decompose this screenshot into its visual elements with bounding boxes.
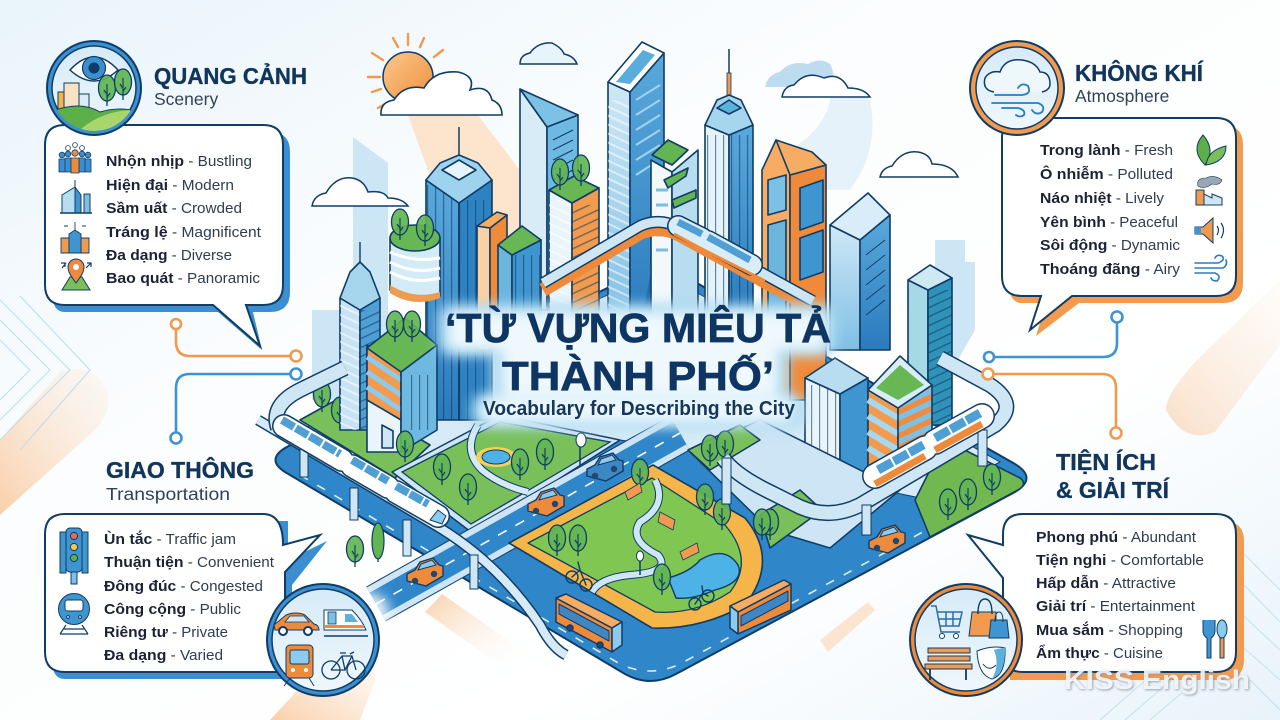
icon: eye and city scenery xyxy=(47,41,141,140)
vocabulary list: Tráng lệ - Magnificent xyxy=(106,224,261,241)
icon: map pin xyxy=(61,259,91,290)
building: striped left centre xyxy=(367,311,437,452)
icon: skyscrapers xyxy=(60,180,92,213)
faded background skyline xyxy=(312,70,975,400)
vocabulary list xyxy=(1040,142,1181,278)
vocabulary list: Hiện đại - Modern xyxy=(106,177,234,194)
vocabulary list: Phong phú - Abundant xyxy=(1036,529,1196,546)
park block upper left xyxy=(392,415,620,532)
right elevated rail and train xyxy=(722,358,1006,535)
icon: far right cloud xyxy=(880,152,958,177)
building: white terraced xyxy=(651,140,698,320)
icon: cloud and wind xyxy=(970,41,1064,135)
title glow xyxy=(438,304,836,428)
green patch behind train xyxy=(300,381,430,478)
city illustration xyxy=(258,42,1026,681)
building: orange and blue panels xyxy=(762,140,826,400)
watermark: KISS English xyxy=(1064,665,1250,695)
building: slim left tower xyxy=(340,242,380,430)
train: left xyxy=(282,420,446,524)
block lower right xyxy=(688,420,900,548)
icon: left cloud xyxy=(312,178,408,206)
vocabulary list: Đa dạng - Diverse xyxy=(106,247,232,264)
panel: Tiện ích và giải trí xyxy=(910,448,1244,696)
icon: pond xyxy=(668,554,739,598)
icon: sun xyxy=(368,34,443,108)
icon: metro train xyxy=(58,594,90,634)
vocabulary list: Đông đúc - Congested xyxy=(104,578,263,595)
building: striped right xyxy=(868,356,932,490)
icon: vehicles circle xyxy=(267,584,379,696)
vocabulary list xyxy=(106,153,261,287)
building: teal slim xyxy=(908,265,952,425)
road dashes xyxy=(300,475,1000,671)
vocabulary list: Riêng tư - Private xyxy=(104,624,228,641)
platform base xyxy=(276,262,1026,681)
train: skyway xyxy=(674,222,765,281)
building: wedge tower xyxy=(520,89,578,310)
green right corner xyxy=(915,440,1024,537)
building: orange slab xyxy=(477,212,507,350)
subheading: Atmosphere xyxy=(1075,86,1169,106)
back buildings xyxy=(340,42,952,505)
icon: cars xyxy=(407,453,905,586)
building: white and orange with roof garden xyxy=(549,155,599,330)
bubble xyxy=(1002,118,1243,336)
vocabulary list: Tiện nghi - Comfortable xyxy=(1036,552,1204,569)
vocabulary list: Ẩm thực - Cuisine xyxy=(1036,644,1163,662)
bubble xyxy=(45,514,327,679)
subheading: Transportation xyxy=(106,484,230,504)
icon: right cloud xyxy=(765,60,870,97)
upper skyway and train xyxy=(543,222,813,308)
vocabulary list: Trong lành - Fresh xyxy=(1040,142,1173,159)
icon: cyclists xyxy=(566,562,714,610)
title xyxy=(445,305,831,420)
vocabulary list: Yên bình - Peaceful xyxy=(1040,214,1178,231)
heading: QUANG CẢNH xyxy=(154,61,307,89)
panel: Giao thông xyxy=(45,456,379,696)
icon: crowd xyxy=(59,143,91,173)
left elevated rail and train xyxy=(258,368,566,655)
heading: GIAO THÔNG xyxy=(106,456,254,483)
title: THÀNH PHỐ’ xyxy=(502,353,774,399)
icon: bus right xyxy=(730,580,791,634)
building: round green roof xyxy=(390,209,440,302)
subheading: Scenery xyxy=(154,89,218,109)
building: spire tower xyxy=(705,49,753,320)
vocabulary list: Nhộn nhịp - Bustling xyxy=(106,153,252,170)
icon: leaves xyxy=(1197,135,1226,165)
vocabulary list: Hấp dẫn - Attractive xyxy=(1036,575,1176,592)
bubble xyxy=(45,125,290,350)
title: ‘TỪ VỰNG MIÊU TẢ xyxy=(445,305,831,351)
icon: grand building xyxy=(61,222,89,253)
vocabulary list: Mua sắm - Shopping xyxy=(1036,621,1183,639)
icon: wind xyxy=(1195,255,1227,281)
vocabulary list: Náo nhiệt - Lively xyxy=(1040,190,1165,207)
trees outside platform xyxy=(346,523,384,567)
icon: large cloud xyxy=(381,72,502,115)
heading: KHÔNG KHÍ xyxy=(1075,59,1204,86)
vocabulary list: Sôi động - Dynamic xyxy=(1040,237,1180,254)
icon: benches xyxy=(625,483,699,560)
subtitle: Vocabulary for Describing the City xyxy=(483,398,796,420)
vocabulary list xyxy=(104,530,274,664)
vocabulary list: Đa dạng - Varied xyxy=(104,647,223,664)
icon: bus left xyxy=(556,594,622,652)
vocabulary list: Công cộng - Public xyxy=(104,601,241,618)
panel: Quang cảnh xyxy=(45,41,307,350)
vocabulary list: Thuận tiện - Convenient xyxy=(104,554,274,571)
heading: & GIẢI TRÍ xyxy=(1056,475,1170,503)
panel: Không khí xyxy=(970,41,1243,336)
building: small orange block xyxy=(738,425,795,505)
building: glass tower xyxy=(608,42,664,330)
watermark: KISS English xyxy=(1065,666,1251,696)
train: right xyxy=(875,413,982,484)
building: big glass right xyxy=(830,193,890,350)
vocabulary list xyxy=(1036,529,1204,662)
sun ray beam xyxy=(408,115,535,290)
vocabulary list: Ùn tắc - Traffic jam xyxy=(104,530,236,548)
vocabulary list: Sầm uất - Crowded xyxy=(106,200,242,217)
icon: small top cloud xyxy=(520,43,577,64)
vocabulary list: Thoáng đãng - Airy xyxy=(1040,261,1181,278)
sun and clouds xyxy=(312,34,958,206)
central park xyxy=(509,459,770,628)
building: lower right glass xyxy=(805,358,868,490)
heading: TIỆN ÍCH xyxy=(1056,448,1156,475)
vocabulary list: Ô nhiễm - Polluted xyxy=(1040,165,1173,183)
inner ground xyxy=(305,272,1000,525)
building: green top block xyxy=(498,226,541,340)
icon: traffic light xyxy=(60,528,88,584)
icon: speaker xyxy=(1195,218,1224,243)
building: dark blue antenna tower xyxy=(426,127,492,420)
bubble xyxy=(968,514,1244,680)
icon: fork and spoon xyxy=(1203,620,1227,658)
vocabulary list: Bao quát - Panoramic xyxy=(106,270,260,287)
connector lines xyxy=(170,312,1122,444)
cross road xyxy=(342,433,680,632)
icon: shopping circle xyxy=(910,584,1022,696)
icon: factory xyxy=(1196,176,1222,205)
heading xyxy=(1056,448,1170,503)
vocabulary list: Giải trí - Entertainment xyxy=(1036,598,1195,615)
